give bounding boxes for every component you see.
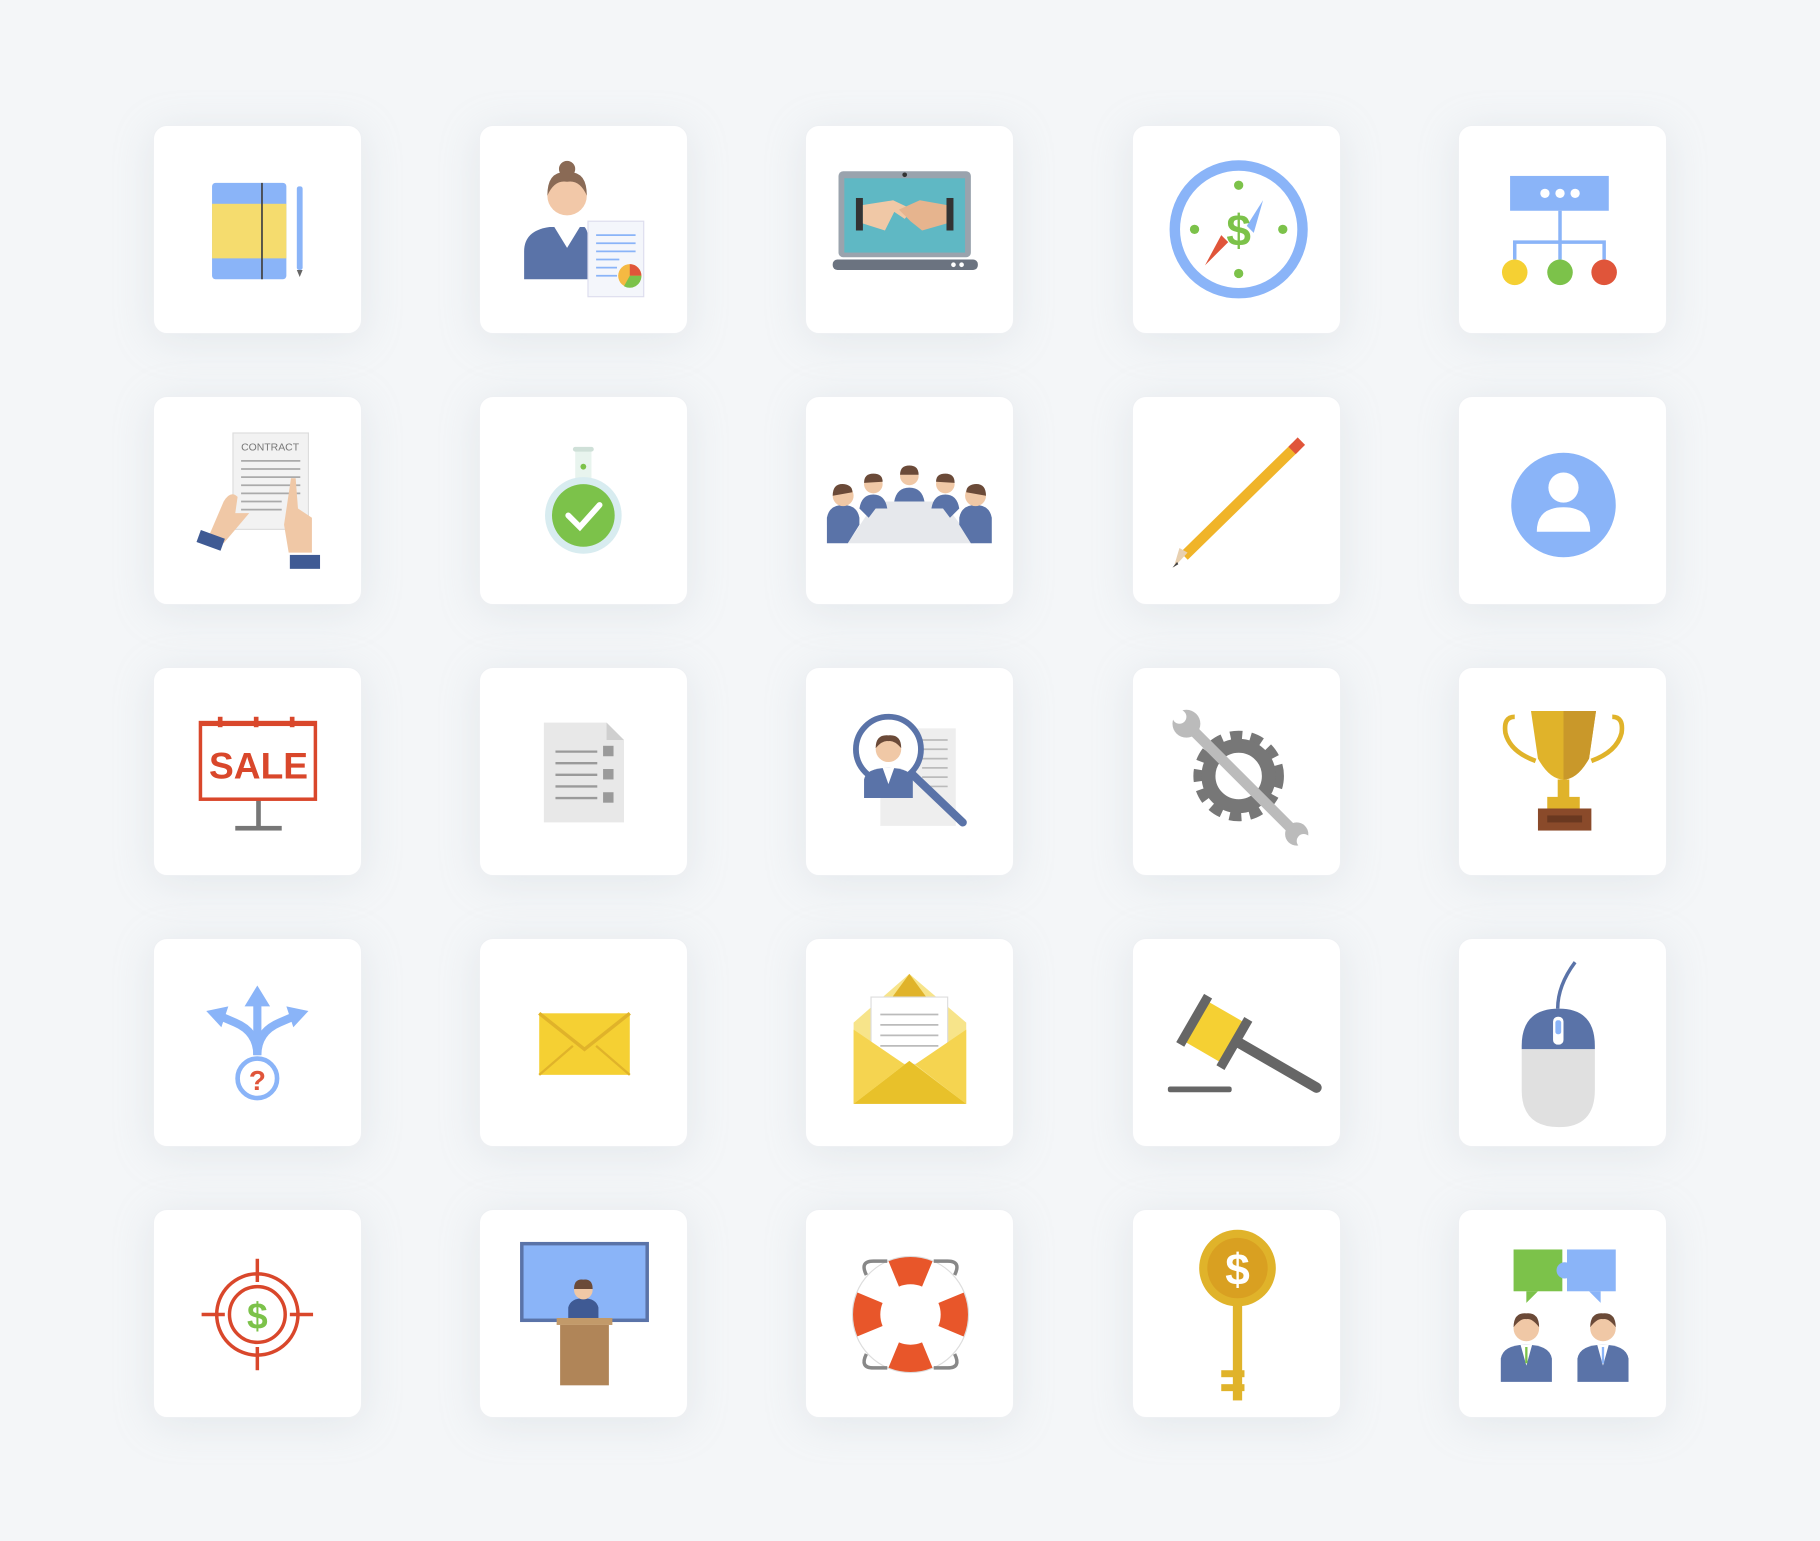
icon: contract in hands: [197, 433, 320, 569]
icon: document list: [544, 723, 624, 822]
icon: lifebuoy: [852, 1256, 969, 1373]
icon: laptop: [833, 171, 978, 270]
icon: flask: [545, 447, 622, 554]
icon: woman with document: [524, 161, 644, 297]
card: collaboration puzzle: [1458, 1209, 1667, 1418]
card: sale sign: [153, 667, 362, 876]
icon: arrows with question: [206, 985, 308, 1098]
icon: magnifier person: [856, 717, 963, 826]
card: laptop handshake: [805, 125, 1014, 334]
card: lifebuoy: [805, 1209, 1014, 1418]
icon: user avatar: [1511, 453, 1616, 557]
icon: computer mouse: [1522, 962, 1595, 1127]
card: notebook: [153, 125, 362, 334]
icon: closed envelope: [539, 1013, 630, 1075]
icon: pencil: [1172, 441, 1301, 568]
card: decision arrows: [153, 938, 362, 1147]
icon: sale board: SALE: [209, 744, 308, 786]
icon: notebook: [212, 183, 303, 279]
icon: hierarchy: [1502, 176, 1617, 285]
card: target dollar: [153, 1209, 362, 1418]
icon: two people with puzzle: [1501, 1249, 1629, 1382]
card: gavel: [1132, 938, 1341, 1147]
icon: key: [1199, 1230, 1276, 1400]
card: pencil: [1132, 396, 1341, 605]
card: envelope: [479, 938, 688, 1147]
card: gear wrench: [1132, 667, 1341, 876]
icon: contract in hands: CONTRACT: [241, 442, 300, 453]
card: mouse: [1458, 938, 1667, 1147]
icon: target: [202, 1259, 313, 1370]
card: org chart: [1458, 125, 1667, 334]
icon: meeting table: [827, 466, 992, 543]
card: contract: [153, 396, 362, 605]
icon: compass: $: [1226, 207, 1251, 256]
card: meeting: [805, 396, 1014, 605]
icon: target: $: [247, 1294, 268, 1336]
icon: arrows with question: ?: [249, 1065, 266, 1096]
icon: gear and wrench: [1172, 710, 1311, 848]
icon: speaker at podium: [522, 1244, 647, 1385]
card: dollar key: [1132, 1209, 1341, 1418]
card: open envelope: [805, 938, 1014, 1147]
card: presentation: [479, 1209, 688, 1418]
card: businesswoman report: [479, 125, 688, 334]
icon: compass: [1175, 165, 1303, 293]
card: compass dollar: [1132, 125, 1341, 334]
card: document: [479, 667, 688, 876]
icon: key: $: [1225, 1245, 1250, 1294]
icon: trophy: [1505, 711, 1622, 831]
icon: open envelope letter: [854, 974, 966, 1104]
card: flask check: [479, 396, 688, 605]
card: candidate search: [805, 667, 1014, 876]
icon: sale board: [200, 717, 315, 831]
card: trophy: [1458, 667, 1667, 876]
icon: gavel: [1168, 994, 1316, 1092]
card: user: [1458, 396, 1667, 605]
